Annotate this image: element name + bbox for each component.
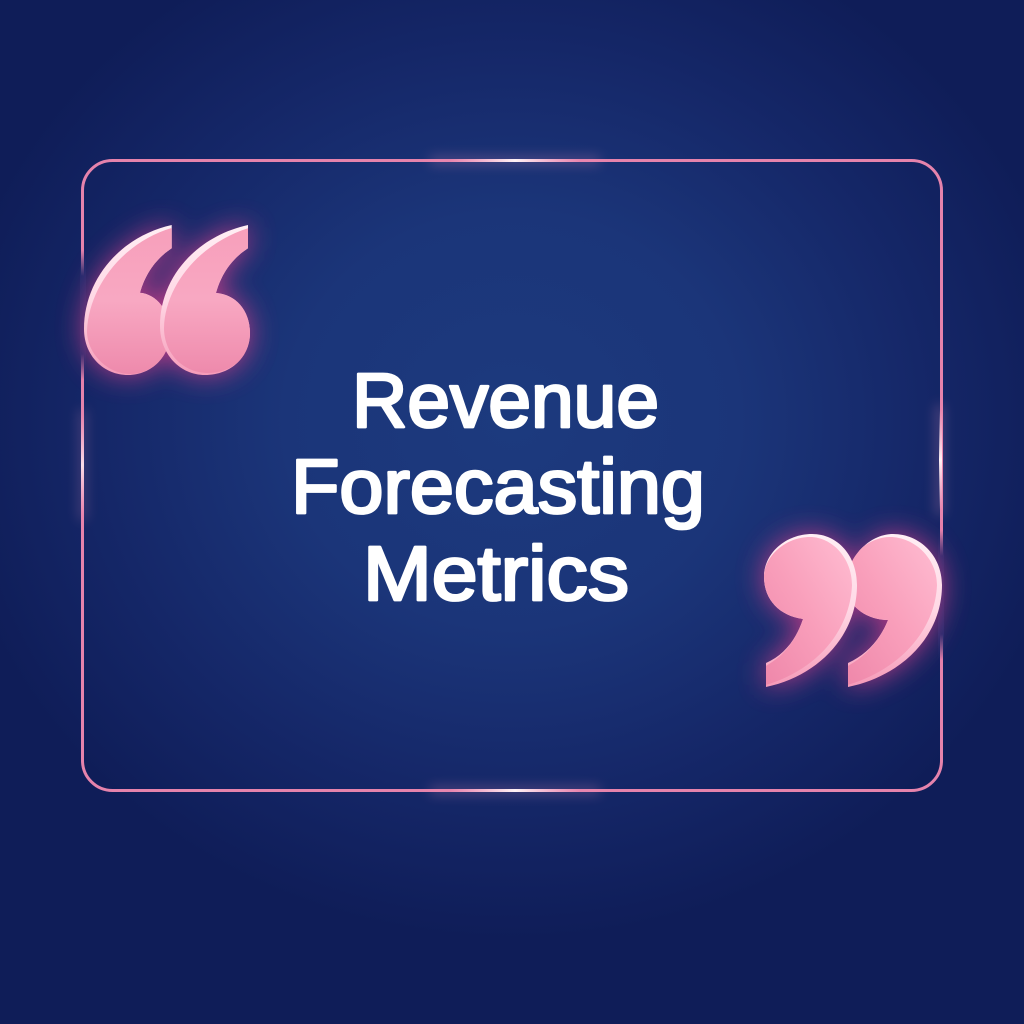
icon: closing quotation mark — [760, 530, 945, 690]
right comma — [848, 534, 942, 687]
title: Forecasting — [291, 444, 705, 530]
frame highlight: bottom — [430, 787, 600, 794]
left comma — [84, 225, 172, 375]
frame highlight: left — [79, 410, 86, 520]
frame highlight: right — [936, 405, 943, 515]
frame highlight: top — [430, 157, 600, 164]
glow — [84, 225, 250, 375]
title: Metrics — [363, 531, 629, 617]
glow — [764, 534, 942, 687]
frame fade behind opening quote — [80, 250, 86, 380]
icon: opening quotation mark — [80, 220, 255, 380]
frame fade behind closing quote — [938, 530, 944, 660]
title: Revenue — [352, 358, 659, 444]
right comma — [160, 225, 250, 375]
frame — [79, 157, 944, 794]
left comma — [764, 534, 857, 687]
title — [291, 358, 705, 617]
